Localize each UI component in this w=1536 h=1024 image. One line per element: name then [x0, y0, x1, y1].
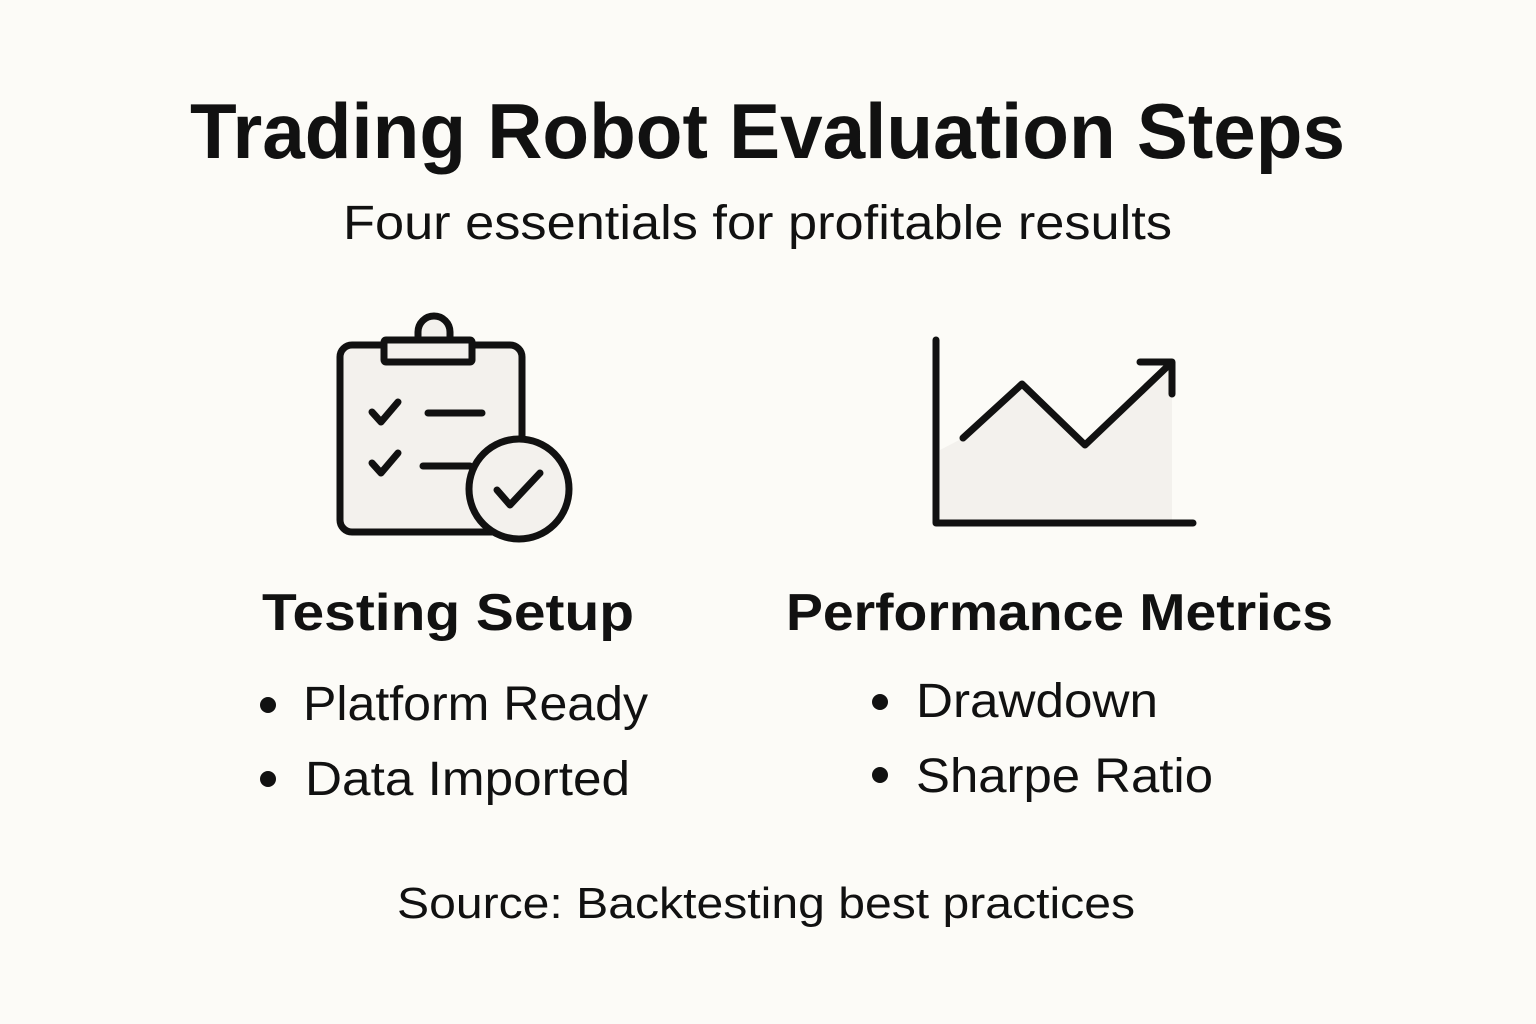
title: Trading Robot Evaluation Steps — [190, 87, 1345, 175]
subtitle: Four essentials for profitable results — [343, 197, 1172, 250]
heading: performance metrics: Performance Metrics — [786, 584, 1333, 642]
bullet list: testing setup: Data Imported — [305, 753, 630, 806]
source note: Source: Backtesting best practices — [397, 879, 1135, 928]
icon: clipboard with checks — [340, 316, 569, 539]
bullet list: performance metrics: Drawdown — [916, 675, 1158, 728]
icon: rising line chart — [936, 340, 1193, 523]
bullet list: performance metrics: Sharpe Ratio — [916, 750, 1213, 803]
bullet list: testing setup — [260, 678, 648, 806]
heading: testing setup: Testing Setup — [262, 584, 634, 642]
panel: performance metrics — [786, 584, 1333, 803]
bullet list: performance metrics — [872, 675, 1213, 803]
panel: testing setup — [260, 584, 648, 806]
bullet list: testing setup: Platform Ready — [303, 678, 648, 731]
